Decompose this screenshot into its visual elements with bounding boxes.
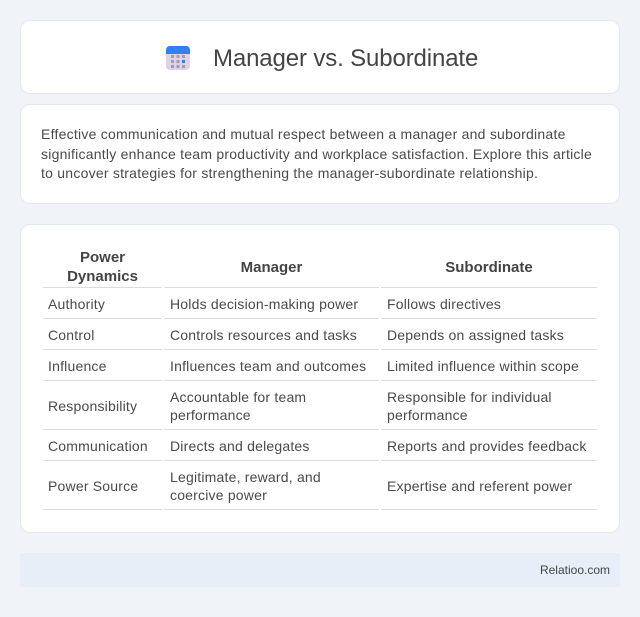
comparison table: Expertise and referent power [387,478,572,494]
intro text [41,126,592,181]
panel: comparison table [20,224,620,533]
comparison table: performance [170,407,251,423]
row: Authority [48,296,501,312]
comparison table: Communication [48,438,148,454]
header: Power Dynamics: Power Dynamics [67,249,138,285]
row: Responsibility [48,389,552,423]
comparison table: Legitimate, reward, and [170,469,321,485]
comparison table: Limited influence within scope [387,358,579,374]
comparison table: Holds decision-making power [170,296,358,312]
comparison table: Depends on assigned tasks [387,327,564,343]
comparison table: Power Source [48,478,138,494]
row: Power Source [48,469,572,503]
header: Manager: Manager [241,259,302,276]
comparison table: Responsibility [48,398,137,414]
comparison table: Directs and delegates [170,438,310,454]
intro text: Effective communication and mutual respect between a manager and subordinate [41,126,566,142]
comparison table: Controls resources and tasks [170,327,357,343]
intro text: to uncover strategies for strengthening the manager-subordinate relationship. [41,165,538,181]
row: Communication [48,438,587,454]
comparison table: Authority [48,296,105,312]
comparison table: Reports and provides feedback [387,438,587,454]
row: Control [48,327,564,343]
row: Influence [48,358,579,374]
comparison table: Influences team and outcomes [170,358,366,374]
icon: calendar [166,46,190,70]
comparison table: coercive power [170,487,267,503]
comparison table: Accountable for team [170,389,306,405]
panel: introduction [20,104,620,204]
footer [20,553,620,587]
comparison table: performance [387,407,468,423]
intro text: significantly enhance team productivity and workplace satisfaction. Explore this article [41,146,592,162]
title text: Manager vs. Subordinate [213,45,478,72]
comparison table: Responsible for individual [387,389,552,405]
panel: title [20,20,620,94]
header: Subordinate: Subordinate [445,259,533,276]
comparison table: Control [48,327,95,343]
footer text: Relatioo.com: Relatioo.com [540,563,610,577]
comparison table: Influence [48,358,107,374]
comparison table: Follows directives [387,296,501,312]
